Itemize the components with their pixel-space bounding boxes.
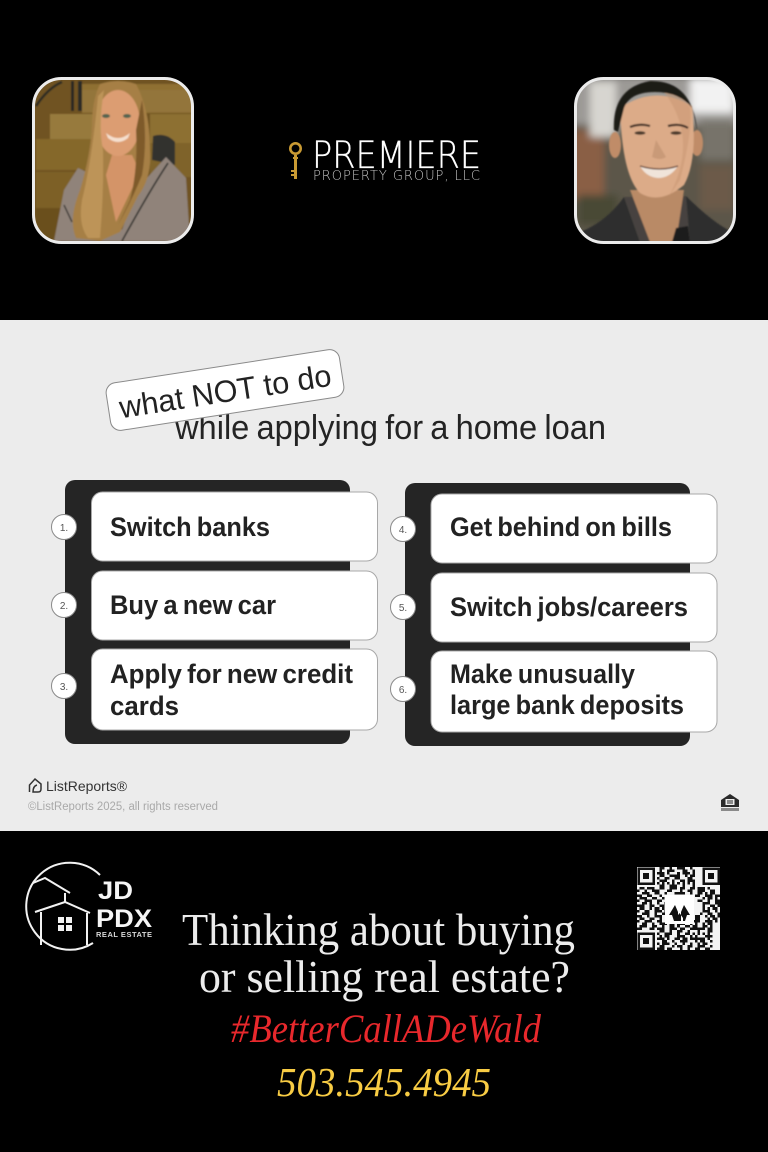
item 3: Apply for new credit cards: cards: [110, 691, 179, 721]
sweater: [54, 157, 190, 241]
footer: ListReports brand: ©ListReports 2025, all rights reserved: [28, 801, 218, 813]
icon: circle with houses: [26, 863, 100, 950]
item 1: Switch banks: Switch banks: [110, 512, 270, 542]
item 2: Buy a new car: Buy a new car: [110, 590, 276, 620]
logo: Premiere Property Group: [290, 134, 481, 184]
bottom black band: [0, 831, 768, 1152]
item 4: Get behind on bills: 4.: [399, 525, 407, 536]
icon: ListReports house: [30, 779, 41, 792]
item 4: Get behind on bills: Get behind on bills: [450, 512, 672, 542]
logo: JD PDX Real Estate: PDX: [96, 905, 152, 933]
logo: JD PDX Real Estate: [26, 863, 152, 950]
item 3: Apply for new credit cards: Apply for new credit: [110, 659, 353, 689]
icon: QR centre arrows: [669, 905, 690, 921]
top black band: [0, 0, 768, 320]
hashtag: #BetterCallADeWald: [231, 1006, 542, 1051]
skin: [106, 155, 140, 222]
badge: what NOT to do: what NOT to do: [116, 358, 334, 425]
logo: JD PDX Real Estate: REAL ESTATE: [96, 930, 152, 939]
face: [620, 95, 694, 198]
item 3: Apply for new credit cards: [52, 649, 378, 730]
item 2: Buy a new car: 2.: [60, 601, 68, 612]
text: call to action: [182, 905, 575, 1105]
hair: [73, 81, 150, 241]
icon: gold key: [290, 143, 301, 179]
text: call to action: Thinking about buying: [182, 905, 575, 955]
item 1: Switch banks: [52, 492, 378, 561]
photo: smiling man: [570, 75, 740, 245]
item 5: Switch jobs/careers: Switch jobs/careers: [450, 592, 688, 622]
item 6: Make unusually large bank deposits: [390, 651, 717, 732]
item 6: Make unusually large bank deposits: large bank deposits: [450, 690, 684, 720]
ears: [609, 132, 621, 158]
item 3: Apply for new credit cards: 3.: [60, 682, 68, 693]
footer: ListReports brand: [28, 778, 218, 813]
mouth: [640, 166, 678, 178]
icon: equal housing opportunity: [721, 794, 739, 811]
brows and eyes: [630, 125, 688, 128]
panel: list items 1 to 3: [52, 480, 378, 744]
item 1: Switch banks: 1.: [60, 523, 68, 534]
text: call to action: or selling real estate?: [199, 952, 570, 1002]
footer: ListReports brand: ListReports®: [46, 778, 128, 794]
panel: light content area: [0, 320, 768, 831]
QR code: [637, 867, 723, 950]
item 6: Make unusually large bank deposits: 6.: [399, 685, 407, 696]
item 4: Get behind on bills: [390, 494, 717, 563]
panel: list items 4 to 6: [390, 483, 717, 746]
text: Property Group, LLC: PROPERTY GROUP, LLC: [313, 169, 480, 184]
item 2: Buy a new car: [52, 571, 378, 640]
logo: JD PDX Real Estate: JD: [98, 877, 133, 905]
heading: while applying for a home loan: while applying for a home loan: [174, 409, 606, 447]
item 5: Switch jobs/careers: [390, 573, 717, 642]
hair: [614, 81, 697, 132]
jacket: [576, 196, 734, 242]
photo: woman on stairs: [30, 75, 200, 245]
text: PREMIERE: PREMIERE: [312, 134, 481, 177]
item 6: Make unusually large bank deposits: Make unusually: [450, 659, 635, 689]
item 5: Switch jobs/careers: 5.: [399, 603, 407, 614]
phone number: 503.545.4945: [277, 1059, 491, 1105]
